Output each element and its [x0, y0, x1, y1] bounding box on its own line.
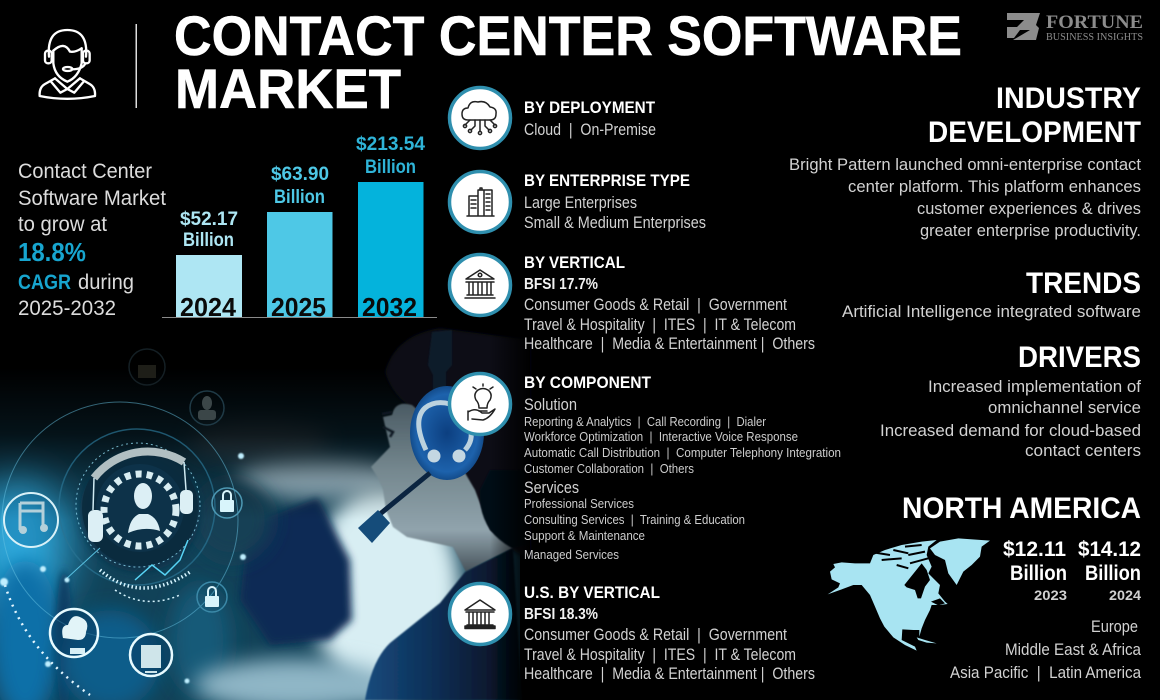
- text block: by component: [524, 373, 841, 562]
- bar 2025: 2025: [271, 292, 326, 322]
- icon: cloud network: [450, 88, 510, 148]
- hair: [385, 328, 530, 560]
- logo: Fortune Business Insights: FORTUNE: [1046, 12, 1143, 33]
- bar 2032: [356, 134, 425, 322]
- map: North America: [828, 538, 990, 651]
- text block: CAGR summary: during: [78, 271, 134, 294]
- text block: CAGR summary: 2025-2032: [18, 297, 116, 320]
- text block: U.S. by vertical: [524, 583, 815, 683]
- text block: U.S. by vertical: BFSI 18.3%: [524, 606, 598, 623]
- text block: other regions: Europe: [1091, 618, 1138, 636]
- heading: industry development: INDUSTRY: [996, 82, 1141, 115]
- stat: 2023 value: Billion: [1010, 562, 1067, 585]
- face and neck: [371, 404, 513, 572]
- icon: U.S. bank building: [450, 584, 510, 644]
- holographic interface: [2, 402, 238, 695]
- text block: by vertical: [524, 253, 815, 353]
- text block: drivers body: contact centers: [1025, 442, 1141, 460]
- text block: U.S. by vertical: Healthcare | Media & Entertainment | Others: [524, 665, 815, 683]
- microphone: [358, 510, 390, 543]
- text block: drivers body: Increased implementation of: [928, 378, 1141, 396]
- logo: Fortune Business Insights: [1007, 12, 1143, 43]
- heading: industry development: [928, 82, 1141, 149]
- icon: office buildings: [450, 172, 510, 232]
- text block: drivers body: [880, 378, 1141, 460]
- heading: north america: NORTH AMERICA: [902, 492, 1141, 525]
- stat: 2023 value: [1003, 538, 1067, 603]
- bar 2032: $213.54: [356, 134, 425, 155]
- text block: drivers body: Increased demand for cloud-based: [880, 422, 1141, 440]
- fade right: [490, 330, 530, 700]
- text block: by component: Support & Maintenance: [524, 529, 645, 543]
- stat: 2024 value: [1078, 538, 1141, 603]
- text block: industry development body: [789, 156, 1141, 240]
- text block: by component: Managed Services: [524, 548, 619, 562]
- heading: trends: TRENDS: [1026, 267, 1141, 300]
- text block: by component: Reporting & Analytics | Call Recording | Dialer: [524, 415, 766, 429]
- text block: U.S. by vertical: U.S. BY VERTICAL: [524, 583, 660, 602]
- text block: drivers body: omnichannel service: [988, 399, 1141, 417]
- text block: by vertical: Consumer Goods & Retail | Government: [524, 296, 787, 314]
- glowing nodes: [0, 453, 246, 684]
- icon: agent with headset: [40, 30, 95, 99]
- text block: CAGR summary: [18, 160, 166, 320]
- text block: CAGR summary: Contact Center: [18, 160, 152, 183]
- icon: lightbulb in hand: [450, 374, 510, 434]
- text block: other regions: Middle East & Africa: [1005, 641, 1142, 659]
- icon glyphs: [19, 365, 234, 673]
- bar 2024: [176, 209, 242, 322]
- text block: CAGR summary: Software Market: [18, 187, 166, 210]
- text block: by component: BY COMPONENT: [524, 373, 652, 392]
- bar chart: market size: [162, 134, 437, 322]
- floating icon circles: [4, 349, 242, 676]
- text block: by deployment: BY DEPLOYMENT: [524, 98, 656, 117]
- headset band: [428, 330, 452, 392]
- text block: by vertical: Healthcare | Media & Entertainment | Others: [524, 335, 815, 353]
- text block: other regions: Asia Pacific | Latin America: [950, 664, 1142, 682]
- text block: by component: Services: [524, 479, 579, 497]
- text block: trends body: Artificial Intelligence integrated software: [842, 303, 1141, 321]
- text block: industry development body: Bright Pattern launched omni-enterprise contact: [789, 156, 1141, 174]
- text block: CAGR summary: CAGR: [18, 271, 71, 294]
- icon: bank building: [450, 254, 510, 316]
- text block: by component: Customer Collaboration | Others: [524, 462, 694, 476]
- logo: Fortune Business Insights: BUSINESS INSIGHTS: [1046, 32, 1143, 43]
- text block: by vertical: BFSI 17.7%: [524, 276, 598, 293]
- bar 2032: Billion: [365, 157, 416, 178]
- stat: 2023 value: 2023: [1034, 587, 1067, 603]
- text block: by component: Automatic Call Distribution | Computer Telephony Integration: [524, 446, 841, 460]
- divider: [136, 24, 137, 108]
- hair strands: [480, 470, 530, 548]
- text block: by enterprise type: Small & Medium Enterprises: [524, 214, 706, 232]
- title: MARKET: [175, 57, 401, 120]
- text block: by enterprise type: [524, 171, 706, 232]
- text block: CAGR summary: 18.8%: [18, 237, 86, 267]
- eye and brow: [382, 412, 393, 437]
- text block: CAGR summary: to grow at: [18, 213, 107, 236]
- text block: by enterprise type: BY ENTERPRISE TYPE: [524, 171, 690, 190]
- blurred office backdrop: [0, 340, 520, 700]
- text block: by vertical: Travel & Hospitality | ITES | IT & Telecom: [524, 316, 796, 334]
- text block: industry development body: customer experiences & drives: [917, 200, 1141, 218]
- stat: 2024 value: $14.12: [1078, 538, 1141, 561]
- text block: by component: Consulting Services | Training & Education: [524, 513, 745, 527]
- bar 2025: Billion: [274, 187, 325, 208]
- fade top: [0, 330, 540, 520]
- text block: industry development body: center platform. This platform enhances: [848, 178, 1141, 196]
- bar 2024: Billion: [183, 230, 234, 251]
- bar 2025: [267, 164, 332, 322]
- stat: 2023 value: $12.11: [1003, 538, 1066, 561]
- bar 2032: 2032: [362, 292, 417, 322]
- microphone boom: [380, 473, 430, 514]
- chart baseline: [162, 317, 437, 318]
- text block: U.S. by vertical: Consumer Goods & Retail | Government: [524, 626, 787, 644]
- stat: 2024 value: 2024: [1109, 587, 1141, 603]
- text block: by component: Solution: [524, 396, 577, 414]
- title: CONTACT CENTER SOFTWARE: [174, 4, 962, 67]
- headset ear cup: [410, 386, 484, 480]
- bar 2025: $63.90: [271, 164, 329, 185]
- background photo: agent with holographic interface: [0, 328, 540, 700]
- text block: industry development body: greater enterprise productivity.: [920, 222, 1141, 240]
- title: [174, 4, 962, 120]
- text block: other regions: [950, 618, 1142, 682]
- agent with headset: [358, 328, 530, 700]
- user silhouette and side capsules: [88, 483, 193, 542]
- shoulders: [365, 548, 522, 700]
- text block: by component: Workforce Optimization | Interactive Voice Response: [524, 430, 798, 444]
- text block: by deployment: [524, 98, 656, 139]
- text block: by deployment: Cloud | On-Premise: [524, 121, 656, 139]
- bar 2024: 2024: [180, 292, 237, 322]
- text block: by component: Professional Services: [524, 497, 634, 511]
- heading: industry development: DEVELOPMENT: [928, 116, 1141, 149]
- text block: U.S. by vertical: Travel & Hospitality | ITES | IT & Telecom: [524, 646, 796, 664]
- stat: 2024 value: Billion: [1085, 562, 1141, 585]
- bar 2024: $52.17: [180, 209, 238, 230]
- heading: drivers: DRIVERS: [1018, 341, 1141, 374]
- text block: by enterprise type: Large Enterprises: [524, 194, 637, 212]
- text block: by vertical: BY VERTICAL: [524, 253, 625, 272]
